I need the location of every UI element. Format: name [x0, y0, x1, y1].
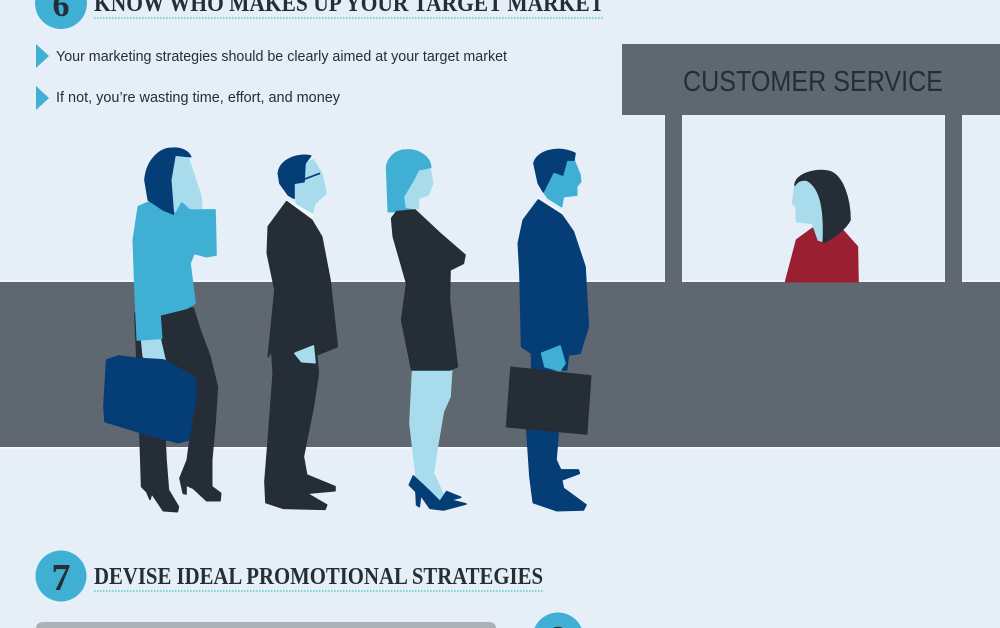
panel: promotional strategies [36, 622, 496, 628]
agent behind the counter [786, 171, 858, 282]
person 4: man with briefcase [507, 150, 591, 511]
section 8 badge [534, 612, 582, 628]
person 2: man with glasses [265, 155, 337, 509]
counter band [0, 280, 1000, 448]
person 1: woman on phone with bag [104, 148, 221, 512]
section 7 heading: DEVISE IDEAL PROMOTIONAL STRATEGIES [94, 564, 543, 590]
section 7 heading [36, 550, 543, 602]
section 7 heading: 7 [52, 557, 70, 599]
bullet list [36, 44, 507, 110]
person 3: woman with crossed arms [387, 150, 466, 510]
bullet list: Your marketing strategies should be clearly aimed at your target market [56, 49, 507, 65]
bullet list: If not, you’re wasting time, effort, and money [56, 90, 341, 106]
customer service booth [622, 44, 1000, 282]
section 6 heading [35, 0, 604, 29]
customer service booth: CUSTOMER SERVICE [683, 66, 943, 98]
